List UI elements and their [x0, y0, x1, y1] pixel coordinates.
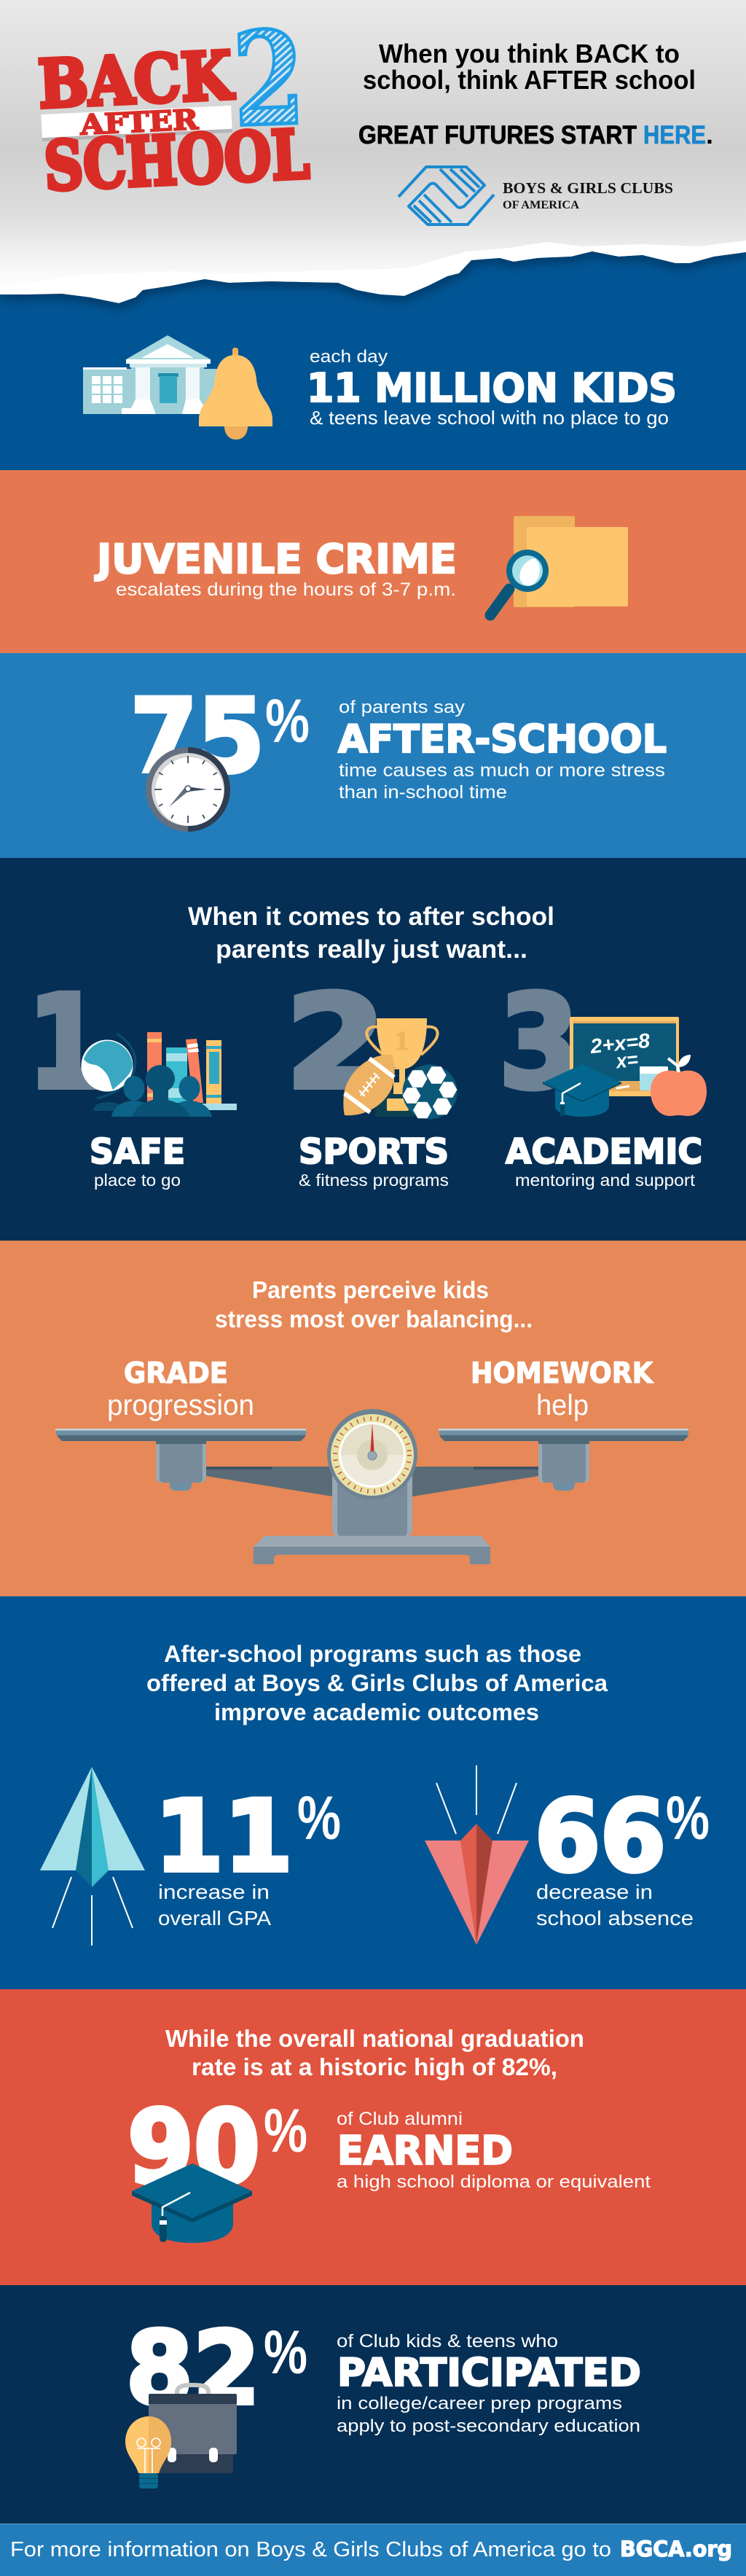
heading: After-school programs such as those: [164, 1641, 581, 1667]
stat: 66%: [535, 1779, 710, 1929]
label: academic: [506, 1132, 702, 1190]
chalk equation: 2+x=8: [589, 1029, 651, 1058]
panel: 11 million kids: [0, 251, 746, 470]
column: [332, 1458, 412, 1537]
panel: graduation: [0, 1989, 746, 2285]
text: earned: [337, 2109, 651, 2192]
icon: globe, books and students: [82, 1032, 237, 1117]
arms: [206, 1467, 333, 1496]
word BACK: BACK: [36, 37, 235, 123]
dial: [327, 1409, 417, 1499]
ribbon: AFTER: AFTER: [79, 103, 199, 141]
label: grade progression: GRADE: [124, 1357, 228, 1390]
icon: briefcase and light bulb: [125, 2385, 237, 2489]
numeral 1: 1: [28, 968, 103, 1117]
base: [254, 1536, 490, 1547]
ribbon: AFTER: [41, 101, 232, 143]
panel: header: [0, 0, 746, 306]
label: academic: mentoring and support: [515, 1171, 696, 1190]
stat: 11%: 11: [154, 1779, 293, 1894]
text: 11 million kids: [307, 347, 677, 429]
icon: paper plane down: [425, 1765, 529, 1945]
panel: academic outcomes: [0, 1596, 746, 1989]
tagline: When you think BACK to: [379, 39, 680, 69]
heading: While the overall national graduation: [165, 2025, 584, 2052]
footer: For more information on Boys & Girls Clubs of America go to: [10, 2538, 611, 2561]
slogan: HERE: [643, 121, 706, 149]
stat: 66%: %: [666, 1784, 710, 1852]
text: juvenile crime: escalates during the hours of 3-7 p.m.: [116, 579, 456, 600]
heading: Parents perceive kids: [252, 1276, 489, 1303]
text: participated: of Club kids & teens who: [337, 2331, 558, 2351]
icon: graduation cap: [132, 2163, 252, 2243]
panel: 75 percent: [0, 653, 746, 858]
heading: When it comes to after school: [188, 902, 554, 931]
icon: bell: [199, 348, 272, 440]
stat: 11%: %: [297, 1784, 341, 1852]
stat: 11%: increase in: [158, 1881, 270, 1903]
tagline: [363, 39, 696, 95]
heading: [165, 2025, 584, 2080]
stat: 82%: %: [264, 2318, 307, 2386]
icon: trophy and balls: 1: [394, 1027, 409, 1055]
tagline: school, think AFTER school: [363, 65, 696, 95]
label: grade progression: [107, 1357, 254, 1421]
numeral 2: 2: [230, 2, 307, 156]
text: participated: [337, 2331, 641, 2436]
text: after-school: [338, 698, 667, 803]
icon: balance scale: [55, 1409, 688, 1564]
label: grade progression: progression: [107, 1389, 254, 1421]
numeral 3: 3: [499, 968, 579, 1117]
chalk equation: x=: [613, 1048, 639, 1073]
stat: 66%: school absence: [536, 1907, 694, 1929]
word SCHOOL: SCHOOL: [42, 114, 311, 206]
label: sports: & fitness programs: [299, 1171, 449, 1190]
text: earned: of Club alumni: [337, 2109, 463, 2129]
heading: [215, 1276, 533, 1332]
icon: folder and magnifier: [490, 516, 628, 615]
footer: BGCA.org: [620, 2537, 732, 2561]
label: homework help: [471, 1357, 654, 1421]
text: juvenile crime: JUVENILE CRIME: [94, 536, 457, 582]
slogan: GREAT FUTURES START: [358, 121, 637, 149]
label: sports: [299, 1132, 449, 1190]
numeral 2: 2: [286, 968, 386, 1117]
text: after-school: time causes as much or more stress: [339, 760, 665, 781]
chalk equation: [589, 1029, 653, 1075]
heading: rate is at a historic high of 82%,: [192, 2053, 557, 2080]
icon: Boys and Girls Clubs logo: [398, 167, 673, 225]
text: after-school: AFTER-SCHOOL: [338, 717, 667, 762]
text: participated: PARTICIPATED: [337, 2351, 641, 2395]
text: 11 million kids: & teens leave school with no place to go: [310, 407, 669, 429]
icon: Boys and Girls Clubs logo: BOYS & GIRLS CLUBS: [503, 179, 673, 197]
label: sports: SPORTS: [299, 1132, 449, 1172]
text: 11 million kids: each day: [310, 347, 388, 367]
label: homework help: help: [536, 1389, 589, 1421]
text: 11 million kids: 11 MILLION KIDS: [307, 365, 677, 411]
heading: [146, 1641, 608, 1725]
heading: improve academic outcomes: [214, 1699, 539, 1725]
text: earned: a high school diploma or equivalent: [337, 2172, 651, 2192]
icon: paper plane up: [40, 1767, 145, 1945]
slogan: .: [706, 121, 713, 149]
label: safe: SAFE: [90, 1132, 185, 1172]
icon: clock: [146, 747, 230, 832]
heading: [188, 902, 554, 964]
right pan: [439, 1429, 688, 1491]
icon: trophy and balls: [343, 1018, 458, 1120]
icon: chalkboard, cap and apple: [543, 1017, 707, 1117]
panel: what parents want: [0, 858, 746, 1241]
stat: 66%: decrease in: [536, 1881, 653, 1903]
stat: 11%: [154, 1779, 341, 1929]
icon: Boys and Girls Clubs logo: OF AMERICA: [503, 199, 579, 211]
text: earned: EARNED: [337, 2128, 513, 2174]
text: after-school: than in-school time: [339, 782, 507, 803]
label: safe: [90, 1132, 185, 1190]
panel: balancing stress: [0, 1241, 746, 1596]
footer: [0, 2524, 746, 2576]
stat: 82%: 82: [126, 2310, 260, 2427]
stat: 90%: 90: [127, 2088, 260, 2206]
heading: parents really just want...: [216, 935, 527, 964]
label: homework help: HOMEWORK: [471, 1357, 654, 1390]
logo: Back 2 After School: [36, 2, 311, 206]
text: participated: in college/career prep programs: [337, 2394, 622, 2413]
stat: 90%: %: [264, 2096, 307, 2165]
icon: school: [83, 335, 221, 414]
text: after-school: of parents say: [339, 698, 465, 717]
label: safe: place to go: [94, 1171, 181, 1190]
text: participated: apply to post-secondary education: [337, 2416, 640, 2436]
stat: 75%: 75: [130, 677, 264, 795]
stat: 66%: 66: [535, 1779, 666, 1894]
label: academic: ACADEMIC: [506, 1132, 702, 1172]
panel: juvenile crime: [0, 470, 746, 653]
stat: 75%: %: [265, 687, 310, 755]
stat: 11%: overall GPA: [158, 1907, 271, 1929]
heading: stress most over balancing...: [215, 1305, 533, 1332]
left pan: [55, 1429, 306, 1491]
heading: offered at Boys & Girls Clubs of America: [146, 1670, 608, 1696]
panel: participated: [0, 2285, 746, 2524]
